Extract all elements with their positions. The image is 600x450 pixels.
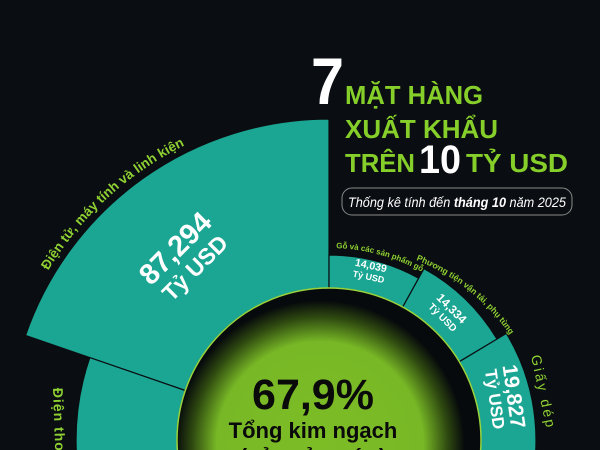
label: Gỗ: Gỗ và các sản phẩm gỗ (336, 242, 424, 271)
title: TỶ USD (466, 148, 568, 178)
sector: Điện tử (26, 119, 329, 390)
value: 87,294: Tỷ USD (157, 230, 233, 306)
center text: 67,9% (252, 371, 374, 419)
sector: Phương tiện (403, 269, 497, 362)
center text: Tổng kim ngạch (229, 418, 397, 443)
chart: radial sectors (26, 119, 536, 450)
center text (229, 371, 397, 450)
title: 7 (311, 44, 344, 118)
inner circle (177, 288, 481, 450)
value: 19,827: 19,827 (498, 363, 529, 430)
title: XUẤT KHẨU (345, 114, 498, 144)
subtitle pill (342, 188, 572, 215)
value: 14,334 (425, 291, 470, 335)
label: Giày dép: Giấy dép (528, 353, 560, 431)
sector: Gỗ (329, 255, 419, 307)
value: 87,294 (133, 206, 235, 308)
sector: Điện thoại (76, 358, 186, 450)
value: 14,334: Tỷ USD (426, 302, 458, 334)
label: Điện tử: Điện tử, máy tính và linh kiện (40, 140, 184, 270)
value: 14,334: 14,334 (434, 291, 470, 327)
label: Phương tiện: Phương tiện vận tải, phụ tùng (416, 254, 514, 335)
title: 10 (419, 138, 461, 182)
value: 19,827 (481, 363, 529, 432)
value: 14,039: 14,039 (354, 257, 388, 275)
title (311, 44, 568, 182)
title: MẶT HÀNG (345, 80, 483, 110)
title: TRÊN (345, 148, 415, 178)
value: 87,294: 87,294 (133, 206, 218, 291)
value: 19,827: Tỷ USD (481, 368, 508, 430)
value: 14,039 (352, 257, 388, 285)
subtitle pill: Thống kê tính đến tháng 10 năm 2025 (348, 194, 566, 210)
sector: Giày dép (459, 333, 536, 450)
value: 14,039: Tỷ USD (352, 269, 386, 285)
